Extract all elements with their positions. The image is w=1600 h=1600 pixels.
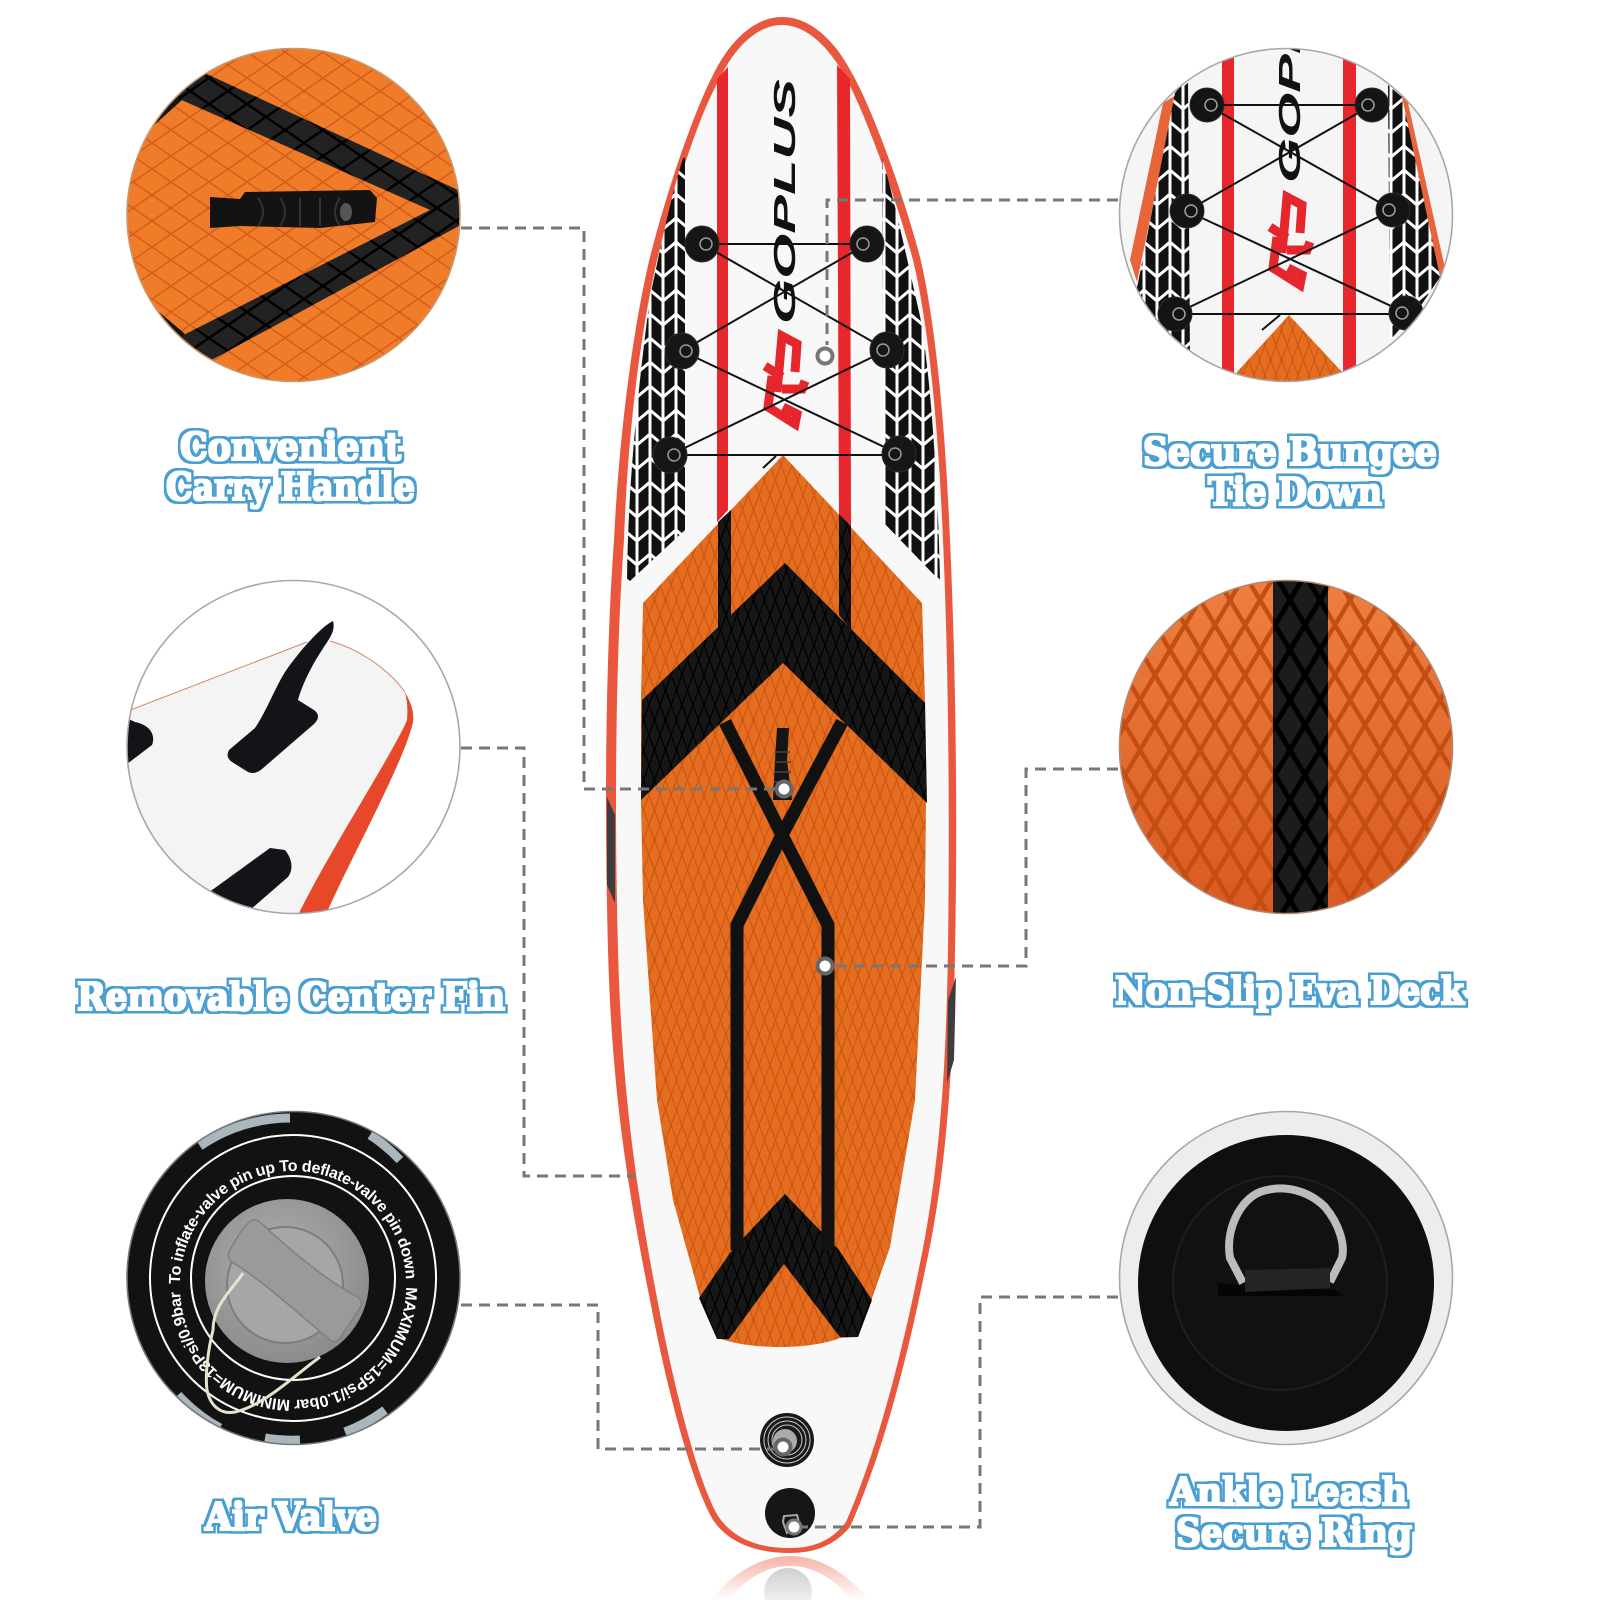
detail: ankle leash ring: [1119, 1111, 1453, 1445]
red stripes: [1222, 50, 1356, 375]
detail: non-slip deck: [1119, 575, 1453, 920]
connector: leash ring: [787, 1297, 1118, 1534]
orange tip: [1237, 315, 1342, 385]
valve rim patches: [178, 1118, 400, 1440]
label: convenient carry handle: Convenient: [180, 424, 401, 469]
detail: bungee tie down: [1120, 48, 1452, 382]
diamond groove pattern: [1119, 580, 1453, 914]
rim segments: [1130, 90, 1447, 282]
valve rings: [150, 1135, 436, 1421]
brand logo mark: [765, 336, 805, 424]
D ring: [1229, 1188, 1343, 1283]
bungee cords: [1190, 104, 1391, 331]
label: secure bungee tie down: Tie Down: [1208, 469, 1382, 514]
partial brand text: GOPLUS: [1272, 0, 1307, 183]
detail: carry handle: [126, 48, 470, 382]
orange deck pad: [641, 455, 926, 1347]
board red rim: [606, 17, 956, 1553]
label: ankle leash secure ring: [1169, 1469, 1412, 1555]
bungee cords: [670, 244, 899, 468]
label: secure bungee tie down: [1143, 429, 1437, 514]
black patch: [1138, 1135, 1434, 1431]
left tread pattern: [627, 158, 685, 581]
tie down D rings: [668, 238, 901, 461]
valve instruction text: To inflate-valve pin up To deflate-valve pin down: [168, 1160, 414, 1284]
strap: [1218, 1283, 1345, 1296]
side fin left: [128, 720, 154, 763]
label: air valve: Air Valve: [204, 1494, 377, 1539]
side handle marks: [607, 797, 956, 1083]
board corner: [120, 641, 413, 925]
label: non-slip eva deck: Non-Slip Eva Deck: [1115, 968, 1465, 1013]
red stripes: [717, 65, 851, 526]
label: removable center fin: Removable Center Fin: [77, 974, 505, 1019]
leash ring on board: [765, 1488, 815, 1538]
label: convenient carry handle: Carry Handle: [166, 464, 415, 509]
connector: center fin: [461, 748, 635, 1176]
label: ankle leash secure ring: Ankle Leash: [1169, 1469, 1407, 1514]
black deck chevrons and straps: [641, 510, 927, 1339]
circle outlines: [127, 48, 1452, 1444]
air valve on board: [760, 1413, 814, 1467]
valve body: [205, 1199, 369, 1363]
tie down pads: [653, 226, 916, 473]
valve pressure text: MAXIMUM=15Psi/1.0bar MINIMUM=13Psi/0.9bar: [172, 1288, 418, 1411]
paddle board: [606, 17, 956, 1553]
handle: [210, 190, 377, 228]
pads: [1158, 88, 1423, 331]
label: convenient carry handle: [166, 424, 415, 509]
tread panels: [1137, 82, 1440, 350]
detail: air valve: [128, 1112, 460, 1444]
label: secure bungee tie down: Secure Bungee: [1143, 429, 1437, 474]
black X straps: [725, 722, 842, 1250]
side fin bottom: [208, 848, 291, 910]
logo mark: [1270, 197, 1310, 285]
connector: air valve: [461, 1305, 790, 1454]
right tread pattern: [882, 158, 940, 581]
brand text: GOPLUS: [767, 78, 802, 324]
connector: eva deck: [818, 769, 1118, 974]
fin: [228, 621, 334, 773]
black strap: [1273, 575, 1328, 920]
black chevron: [176, 74, 460, 360]
connector: bungee: [818, 200, 1118, 364]
valve string: [206, 1273, 320, 1413]
connector: carry handle: [461, 228, 792, 796]
pad D rings: [1173, 99, 1408, 320]
red rim: [298, 692, 413, 915]
board white body: [616, 25, 949, 1548]
carry handle on board: [773, 728, 792, 800]
detail: removable center fin: [128, 621, 414, 914]
board reflection: [712, 1556, 868, 1600]
label: ankle leash secure ring: Secure Ring: [1176, 1510, 1412, 1555]
